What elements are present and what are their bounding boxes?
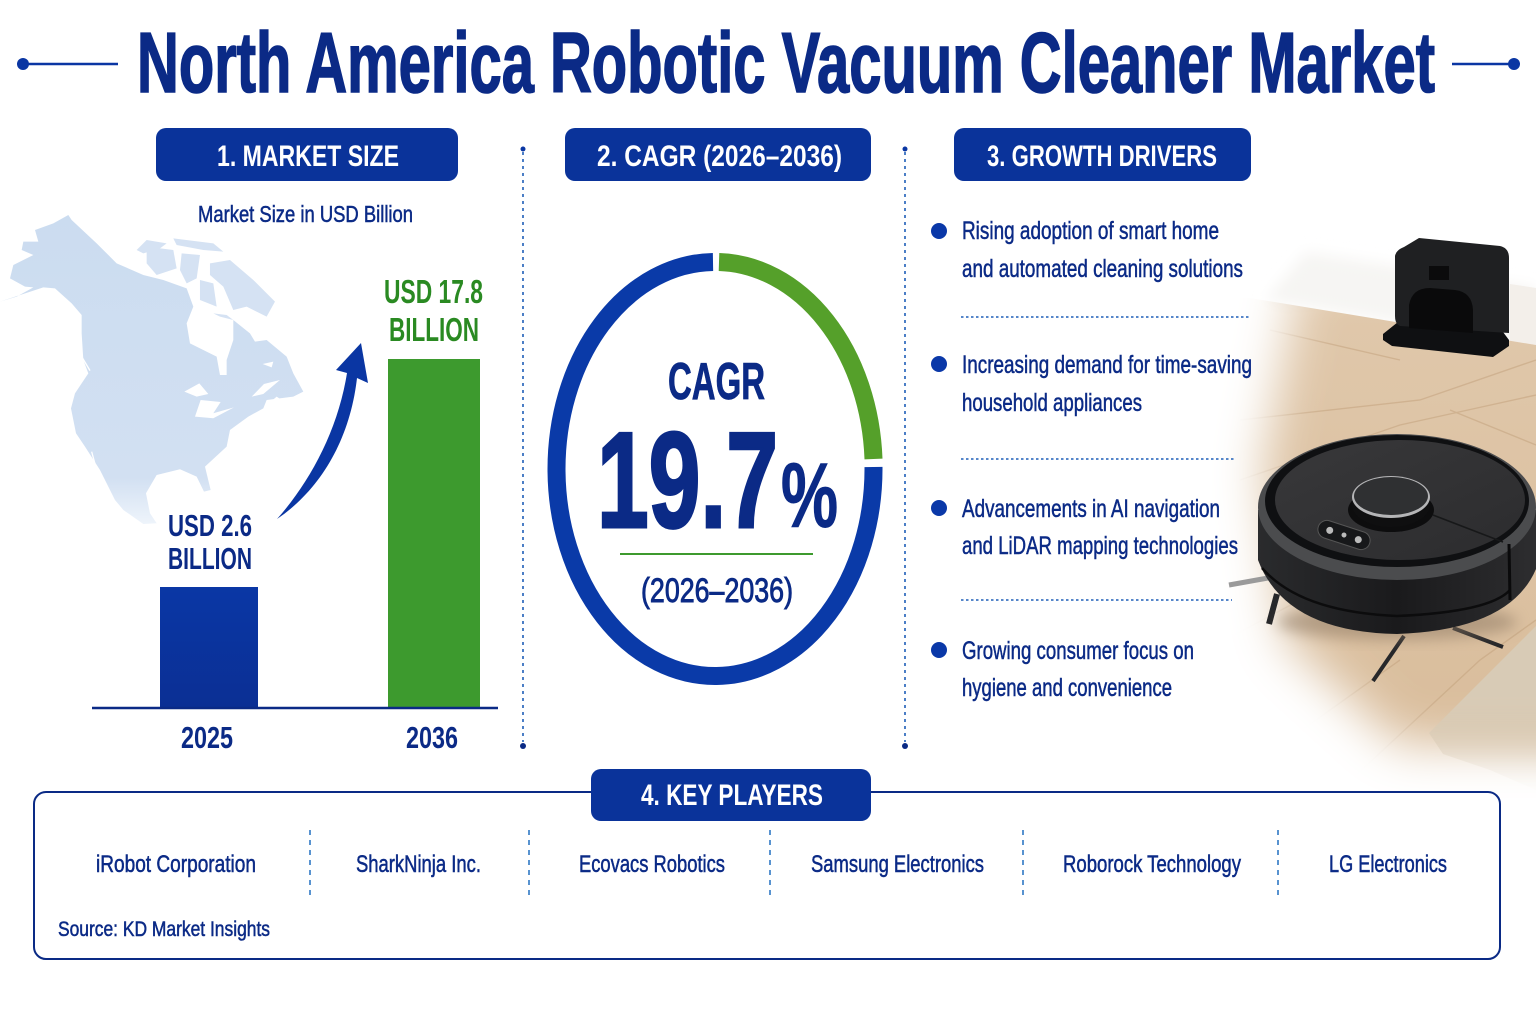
panel: growth drivers [931, 128, 1252, 702]
title ornament left [17, 58, 118, 70]
driver 4: Growing consumer focus on [962, 637, 1194, 665]
driver 3 [931, 495, 1238, 560]
carpet [1430, 626, 1536, 771]
panel: key players [34, 769, 1500, 959]
heading pill: 3. GROWTH DRIVERS [987, 140, 1217, 173]
panel: CAGR [557, 128, 874, 676]
driver 3: Advancements in AI navigation [962, 495, 1220, 523]
period: (2026–2036) [641, 572, 793, 610]
heading pill [954, 128, 1251, 181]
map of North America [0, 215, 303, 524]
ring chart [557, 262, 874, 676]
wooden floor [1234, 300, 1536, 777]
divider left [520, 146, 526, 749]
CAGR value: 19.7 [597, 404, 778, 556]
value 2025: BILLION [168, 541, 252, 576]
value 2036 [384, 273, 483, 348]
heading pill: 2. CAGR (2026–2036) [597, 140, 842, 173]
year labels [181, 720, 458, 755]
heading pill: 1. MARKET SIZE [217, 140, 399, 173]
charging dock [1383, 238, 1509, 357]
driver 4 [931, 637, 1194, 702]
value 2025: USD 2.6 [168, 508, 252, 543]
side brushes [1229, 578, 1503, 681]
CAGR label: CAGR [668, 353, 765, 411]
frame [34, 792, 1500, 959]
player names [96, 851, 1447, 878]
year labels: 2036 [406, 720, 458, 755]
CAGR value: % [781, 445, 838, 547]
heading pill [156, 128, 458, 181]
value 2025 [168, 508, 252, 576]
driver 1 [931, 217, 1243, 283]
driver 2: household appliances [962, 389, 1142, 417]
robot body [1258, 434, 1536, 640]
player names: Samsung Electronics [811, 851, 984, 878]
driver 2 [931, 351, 1252, 417]
bar 2025 [160, 587, 258, 708]
value 2036: USD 17.8 [384, 273, 483, 310]
wall and baseboard [1266, 252, 1536, 345]
player names: LG Electronics [1329, 851, 1447, 878]
player names: Roborock Technology [1063, 851, 1241, 878]
heading pill: 4. KEY PLAYERS [641, 779, 823, 812]
player names: SharkNinja Inc. [356, 851, 481, 878]
driver 3: and LiDAR mapping technologies [962, 532, 1238, 560]
title ornament right [1452, 58, 1520, 70]
divider right [902, 146, 908, 749]
source: Source: KD Market Insights [58, 918, 270, 941]
bar 2036 [388, 359, 480, 708]
green rule [620, 553, 813, 555]
driver 2: Increasing demand for time-saving [962, 351, 1252, 379]
robot vacuum photo illustration [1228, 238, 1536, 782]
growth arrow [277, 343, 368, 519]
panel: market size [0, 128, 498, 755]
heading pill [591, 769, 871, 821]
subtitle: Market Size in USD Billion [198, 201, 413, 227]
driver 1: and automated cleaning solutions [962, 255, 1243, 283]
axis [92, 707, 498, 709]
driver 1: Rising adoption of smart home [962, 217, 1219, 245]
player names: Ecovacs Robotics [579, 851, 725, 878]
value 2036: BILLION [389, 311, 479, 348]
heading pill [565, 128, 871, 181]
driver 4: hygiene and convenience [962, 674, 1172, 702]
player names: iRobot Corporation [96, 851, 256, 878]
year labels: 2025 [181, 720, 233, 755]
